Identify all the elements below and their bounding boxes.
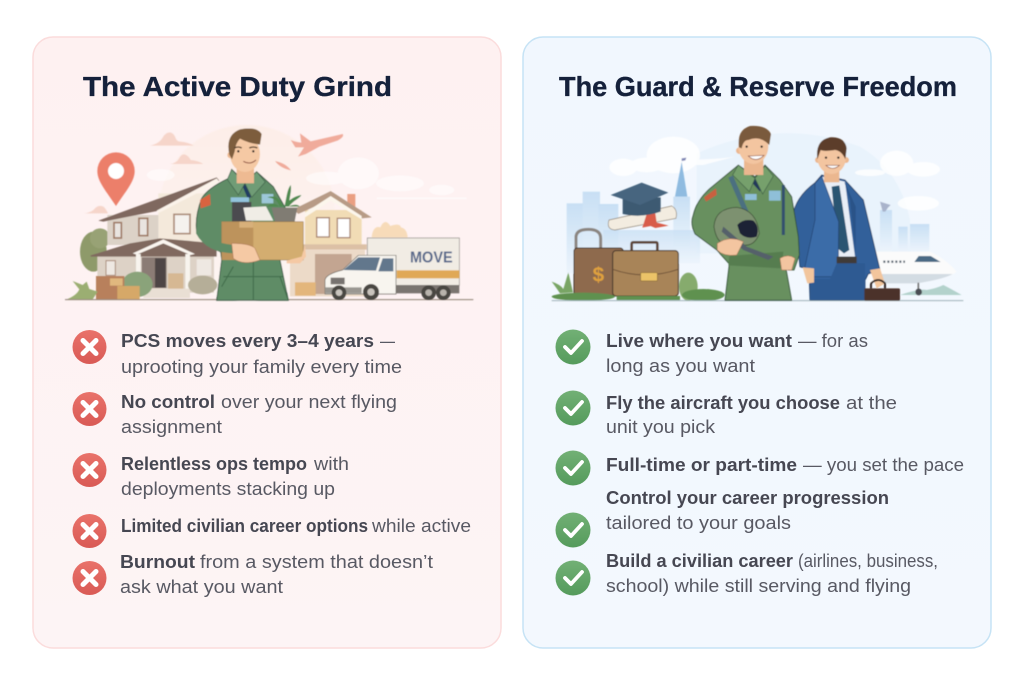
item: full-time or part-time: Full-time or part-time bbox=[606, 455, 797, 475]
icon: red x bbox=[72, 514, 106, 548]
item: fly the aircraft bbox=[556, 390, 897, 437]
item: ops tempo: with bbox=[313, 454, 349, 474]
item: ops tempo bbox=[72, 453, 349, 499]
panel: active duty grind bbox=[33, 37, 501, 648]
ground line bbox=[65, 298, 473, 301]
item: full-time or part-time bbox=[556, 450, 964, 486]
item: fly the aircraft: unit you pick bbox=[606, 417, 716, 437]
icon: green check bbox=[556, 560, 590, 596]
item: fly the aircraft: at the bbox=[846, 393, 897, 413]
item: civilian career: Build a civilian career bbox=[606, 551, 793, 571]
figure: man in suit bbox=[793, 137, 900, 301]
item: burnout bbox=[72, 552, 433, 597]
icon: red x bbox=[72, 330, 106, 364]
item: civilian career: school) while still serving and flying bbox=[606, 576, 911, 596]
icon: green check bbox=[556, 512, 590, 548]
item: civilian career bbox=[556, 551, 938, 596]
icon: red x bbox=[72, 561, 106, 595]
item: PCS moves: — bbox=[380, 331, 395, 351]
item: fly the aircraft: Fly the aircraft you choose bbox=[606, 393, 840, 413]
item: burnout: Burnout bbox=[120, 552, 195, 572]
icon: suitcase and briefcase bbox=[574, 229, 678, 296]
heading: active duty: The Active Duty Grind bbox=[83, 71, 392, 102]
icon: moving truck: MOVE bbox=[410, 250, 453, 267]
icon: graduation cap and diploma bbox=[608, 183, 676, 230]
illustration: pilot moving house bbox=[65, 125, 473, 302]
item: career progression bbox=[556, 488, 889, 548]
item: ops tempo: deployments stacking up bbox=[121, 479, 335, 499]
heading: guard and reserve: The Guard & Reserve Freedom bbox=[559, 71, 957, 102]
item: no control: over your next flying bbox=[221, 392, 397, 412]
item: limited options: Limited civilian career options bbox=[121, 516, 368, 536]
icon: suitcase and briefcase: $ bbox=[593, 264, 605, 287]
figure: pilot with helmet bbox=[692, 126, 799, 300]
figure: pilot with box bbox=[196, 128, 306, 300]
item: PCS moves: uprooting your family every time bbox=[121, 357, 402, 377]
house: right bbox=[287, 191, 372, 296]
item: full-time or part-time: — you set the pace bbox=[803, 455, 964, 475]
item: career progression: Control your career progression bbox=[606, 488, 889, 508]
icon: green check bbox=[556, 330, 590, 364]
item: limited options: while active bbox=[371, 516, 471, 536]
ground bushes bbox=[552, 272, 725, 301]
icon: red x bbox=[72, 392, 106, 426]
icon: map pin bbox=[97, 152, 135, 206]
illustration: pilot and civilian bbox=[552, 126, 963, 301]
item: live where you want bbox=[556, 330, 868, 376]
item: burnout: from a system that doesn’t bbox=[200, 552, 433, 572]
item: live where you want: long as you want bbox=[606, 356, 755, 376]
list: guard and reserve benefits bbox=[556, 330, 964, 596]
item: live where you want: Live where you want bbox=[606, 331, 792, 351]
icon: private jet bbox=[868, 252, 957, 295]
item: burnout: ask what you want bbox=[120, 577, 283, 597]
item: career progression: tailored to your goals bbox=[606, 513, 791, 533]
icon: green check bbox=[556, 450, 590, 486]
item: live where you want: — for as bbox=[798, 331, 868, 351]
item: no control bbox=[72, 392, 397, 437]
item: no control: assignment bbox=[121, 417, 222, 437]
icon: green check bbox=[556, 390, 590, 426]
icon: red x bbox=[72, 453, 106, 487]
item: limited options bbox=[72, 514, 471, 548]
list: active duty drawbacks bbox=[72, 330, 471, 597]
skyline bbox=[567, 192, 929, 273]
item: PCS moves bbox=[72, 330, 402, 377]
item: no control: No control bbox=[121, 392, 215, 412]
item: PCS moves: PCS moves every 3–4 years bbox=[121, 331, 374, 351]
item: civilian career: (airlines, business, bbox=[798, 551, 938, 571]
panel: guard and reserve freedom bbox=[523, 37, 991, 648]
house: left bbox=[67, 177, 219, 299]
item: ops tempo: Relentless ops tempo bbox=[121, 454, 307, 474]
icon: moving truck bbox=[325, 238, 459, 300]
